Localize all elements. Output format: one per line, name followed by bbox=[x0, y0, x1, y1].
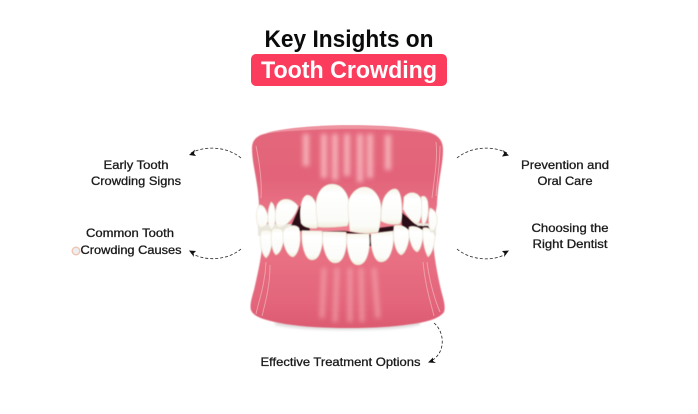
label: Early Tooth Crowding Signs: Crowding Signs bbox=[91, 174, 181, 188]
small decorative ring bbox=[72, 247, 80, 255]
label: Effective Treatment Options: Effective Treatment Options bbox=[260, 355, 420, 369]
lower gum bbox=[251, 226, 445, 330]
title bbox=[251, 26, 447, 86]
upper teeth bbox=[256, 184, 437, 233]
side teeth backing bbox=[258, 222, 436, 236]
arrow: to Effective Treatment Options bbox=[428, 323, 442, 363]
label: Prevention and Oral Care: Prevention and bbox=[521, 158, 609, 172]
label: Early Tooth Crowding Signs: Early Tooth bbox=[104, 158, 168, 172]
label: Early Tooth Crowding Signs bbox=[91, 158, 181, 188]
label: Prevention and Oral Care: Oral Care bbox=[538, 174, 593, 188]
label: Common Tooth Crowding Causes: Common Tooth bbox=[86, 226, 174, 240]
label: Common Tooth Crowding Causes bbox=[80, 226, 182, 257]
illustration: crowded teeth and gums bbox=[251, 126, 445, 330]
title line: Key Insights on: Key Insights on bbox=[264, 26, 434, 53]
arrow: to Early Tooth Crowding Signs bbox=[189, 148, 241, 158]
label: Choosing the Right Dentist bbox=[532, 221, 609, 251]
title highlight: Tooth Crowding: Tooth Crowding bbox=[261, 57, 437, 84]
dark gaps between teeth bbox=[291, 206, 430, 246]
arrow: to Prevention and Oral Care bbox=[457, 148, 509, 158]
lower teeth bbox=[260, 225, 435, 265]
arrow: to Common Tooth Crowding Causes bbox=[189, 249, 241, 259]
label: Choosing the Right Dentist: Choosing the bbox=[532, 221, 609, 235]
label: Choosing the Right Dentist: Right Dentist bbox=[532, 237, 608, 251]
upper gum bbox=[252, 126, 443, 232]
label: Prevention and Oral Care bbox=[521, 158, 609, 188]
label: Common Tooth Crowding Causes: Crowding Causes bbox=[80, 243, 182, 257]
arrow: to Choosing the Right Dentist bbox=[457, 249, 509, 259]
